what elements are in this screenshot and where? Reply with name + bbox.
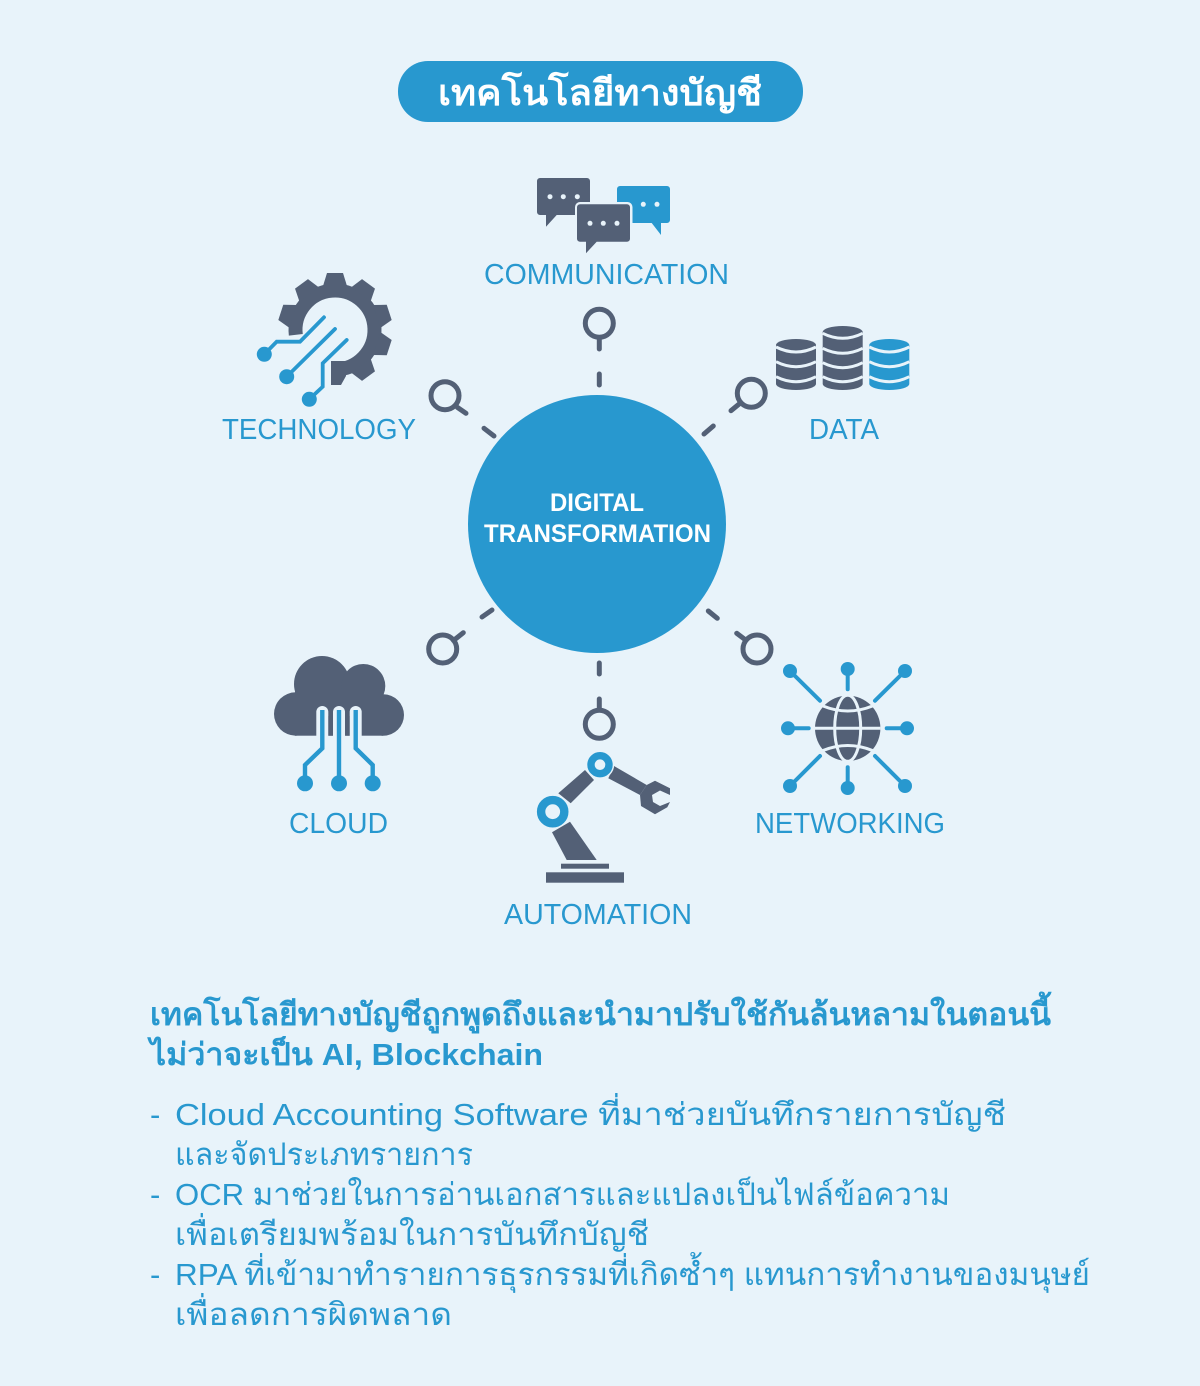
- label: communication: COMMUNICATION: [484, 259, 729, 291]
- connector: communication magnifier: [585, 309, 613, 385]
- heading text block: [147, 991, 1052, 1072]
- bullet list text block: เพื่อลดการผิดพลาด: [175, 1293, 452, 1332]
- bullet list text block: -: [150, 1257, 160, 1292]
- title pill: [398, 61, 803, 122]
- connector: automation magnifier: [585, 663, 613, 738]
- bullet list text block: RPA ที่เข้ามาทำรายการธุรกรรมที่เกิดซ้ำๆ แทนการทำงานของมนุษย์: [175, 1252, 1090, 1294]
- icon: gear with circuit (technology): [257, 273, 393, 407]
- heading text block: เทคโนโลยีทางบัญชีถูกพูดถึงและนำมาปรับใช้กันล้นหลามในตอนนี้: [150, 991, 1052, 1034]
- icon: cloud with circuit: [274, 656, 404, 791]
- central circle: digital transformation: TRANSFORMATION: [484, 520, 711, 548]
- label: technology: TECHNOLOGY: [222, 414, 416, 446]
- bullet list text block: Cloud Accounting Software ที่มาช่วยบันทึกรายการบัญชี: [175, 1093, 1006, 1132]
- icon: database stacks (data): [776, 326, 909, 390]
- bullet list text block: -: [150, 1177, 160, 1212]
- title pill: เทคโนโลยีทางบัญชี: [438, 71, 762, 114]
- central circle: digital transformation: DIGITAL: [550, 489, 644, 517]
- bullet list text block: -: [150, 1097, 160, 1132]
- connector: cloud magnifier: [429, 610, 492, 663]
- connector: networking magnifier: [708, 611, 771, 663]
- label: data: DATA: [809, 414, 880, 446]
- bullet list text block: [150, 1093, 1090, 1332]
- icon: robot arm (automation): [535, 750, 670, 883]
- bullet list text block: เพื่อเตรียมพร้อมในการบันทึกบัญชี: [175, 1213, 649, 1252]
- bullet list text block: และจัดประเภทรายการ: [175, 1137, 473, 1172]
- bullet list text block: OCR มาช่วยในการอ่านเอกสารและแปลงเป็นไฟล์ข้อความ: [175, 1176, 950, 1212]
- connector: technology magnifier: [431, 382, 494, 436]
- label: automation: AUTOMATION: [504, 899, 692, 931]
- connector: data magnifier: [704, 379, 765, 434]
- icon: chat bubbles (communication): [537, 178, 670, 253]
- icon: globe network (networking): [781, 662, 914, 795]
- heading text block: ไม่ว่าจะเป็น AI, Blockchain: [147, 1035, 543, 1072]
- central circle: digital transformation: [468, 395, 726, 653]
- label: cloud: CLOUD: [289, 808, 388, 840]
- label: networking: NETWORKING: [755, 808, 945, 840]
